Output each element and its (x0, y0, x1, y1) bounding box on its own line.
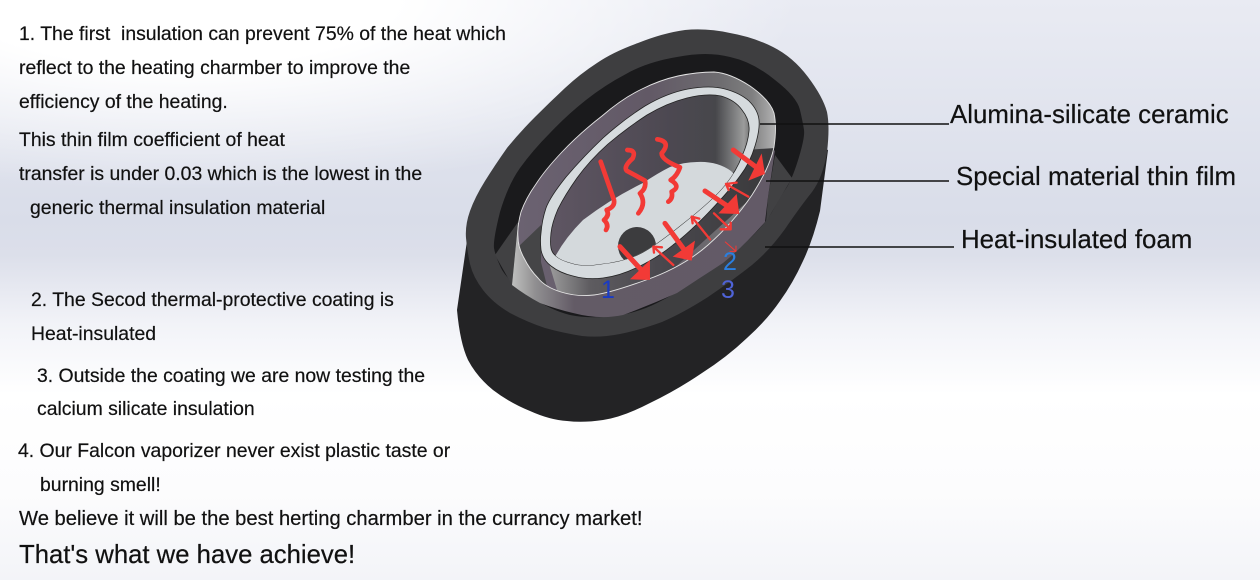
text block: point 1 (19, 23, 506, 219)
text block: point 4 (18, 440, 450, 496)
text block: point 2: 2. The Secod thermal-protective coating is (31, 289, 394, 311)
text: belief statement: We believe it will be the best herting charmber in the currancy market! (19, 508, 642, 530)
layer number 3: 3 (721, 276, 735, 304)
heat squiggles (601, 139, 680, 230)
ceramic chamber inner wall (550, 95, 749, 265)
purple wall band (512, 150, 775, 317)
special material thin film interior (517, 72, 776, 300)
red heat squiggles and arrows (601, 139, 765, 280)
layer number 1: 1 (601, 276, 615, 304)
text block: point 2: Heat-insulated (31, 323, 156, 345)
text block: point 1: generic thermal insulation material (30, 197, 325, 219)
black insulation ring (494, 54, 804, 317)
layer number 2: 2 (723, 248, 737, 276)
text: closing statement: That's what we have achieve! (19, 541, 355, 569)
label: alumina-silicate ceramic: Alumina-silicate ceramic (950, 101, 1229, 129)
text block: point 3: calcium silicate insulation (37, 398, 255, 420)
foam wedges (495, 155, 792, 285)
text block: point 4: burning smell! (40, 474, 161, 496)
chamber floor and hole (556, 162, 734, 266)
heat-insulated foam outer body (457, 29, 828, 422)
label: special material thin film: Special material thin film (956, 163, 1236, 191)
diagram: heating chamber cross-section (457, 29, 954, 422)
text block: point 2 (31, 289, 394, 345)
label: heat-insulated foam: Heat-insulated foam (961, 226, 1192, 254)
alumina-silicate ceramic ring (540, 87, 759, 279)
reflected arrows (653, 183, 748, 265)
text block: point 4: 4. Our Falcon vaporizer never exist plastic taste or (18, 440, 450, 462)
text block: point 1: transfer is under 0.03 which is the lowest in the (19, 163, 422, 185)
text block: point 1: efficiency of the heating. (19, 91, 228, 113)
text block: point 1: reflect to the heating charmber to improve the (19, 57, 410, 79)
leader lines (760, 124, 954, 247)
text block: point 3 (37, 365, 425, 420)
inward arrows (620, 150, 760, 274)
text block: point 1: This thin film coefficient of heat (19, 129, 285, 151)
text block: point 1: 1. The first insulation can prevent 75% of the heat which (19, 23, 506, 45)
text block: point 3: 3. Outside the coating we are now testing the (37, 365, 425, 387)
